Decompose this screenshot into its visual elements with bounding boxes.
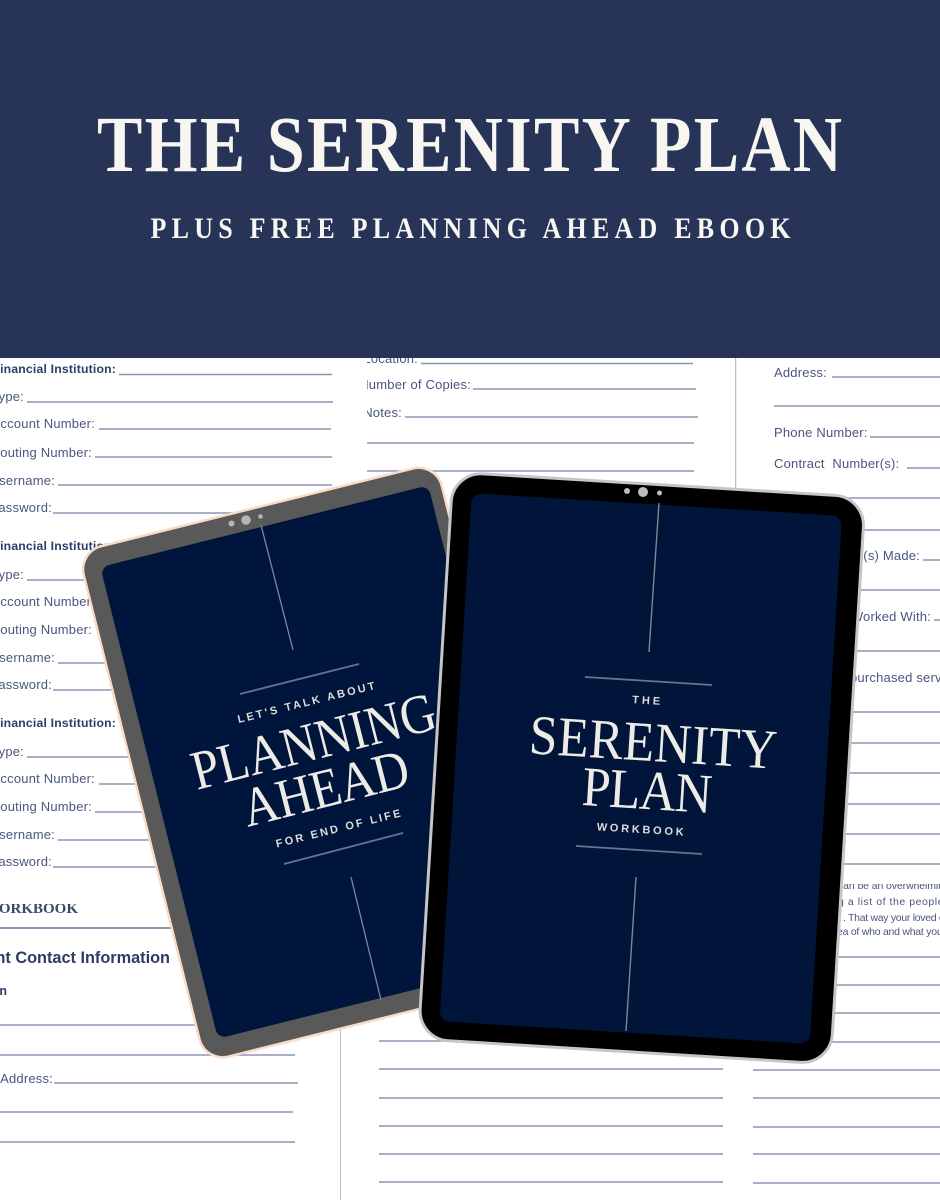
form rows: Address: (774, 365, 827, 380)
lower writing lines (379, 1041, 723, 1182)
contact form lines: Address: (0, 1071, 53, 1086)
form group: third financial institution (0, 716, 160, 869)
tablet screen (100, 485, 546, 1039)
cover text: FOR END OF LIFE (275, 808, 402, 850)
form group: second financial institution (0, 539, 120, 692)
form rows: Who You Worked With: (794, 609, 931, 624)
cover art lines (240, 525, 403, 1000)
form rows (774, 365, 940, 864)
cover text: PLANNING (185, 681, 442, 802)
form rows: Contract Number(s): (774, 456, 899, 471)
cover text: SERENITY (527, 703, 779, 781)
tablet screen (439, 493, 842, 1044)
instruction paragraph (840, 884, 940, 937)
instruction paragraph: ea of who and what you (837, 926, 940, 938)
cover text: WORKBOOK (596, 821, 684, 839)
form rows: Phone Number: (774, 425, 868, 440)
lower writing lines (753, 957, 940, 1183)
banner (0, 0, 940, 358)
panel: middle worksheet page (359, 351, 723, 1182)
camera dots (624, 487, 662, 497)
tablet: planning ahead ebook (78, 463, 563, 1062)
form rows: Location: (363, 351, 418, 366)
cover text (527, 694, 779, 839)
form rows: Number of Copies: (359, 377, 471, 392)
form group: first financial institution (0, 362, 333, 515)
panel: left worksheet page (0, 362, 333, 1142)
divider: left and middle pages (340, 1020, 342, 1200)
camera dots (228, 514, 263, 526)
title: THE SERENITY PLAN (97, 101, 842, 189)
cover text: AHEAD (236, 738, 416, 839)
tablet body (418, 472, 865, 1064)
subtitle: PLUS FREE PLANNING AHEAD EBOOK (150, 212, 791, 245)
form rows (359, 351, 698, 471)
form rows: Payment(s) Made: (811, 548, 920, 563)
divider: middle and right pages (735, 358, 737, 500)
panel: right worksheet page (753, 365, 940, 1183)
tablet: serenity plan workbook (418, 472, 865, 1064)
cover text: LET'S TALK ABOUT (236, 680, 376, 726)
cover art lines (576, 503, 712, 1031)
form rows: Notes: (363, 405, 402, 420)
tablet body (78, 463, 563, 1062)
cover text: PLAN (580, 755, 714, 826)
contact form lines (0, 1025, 298, 1142)
cover text: THE (632, 694, 661, 708)
